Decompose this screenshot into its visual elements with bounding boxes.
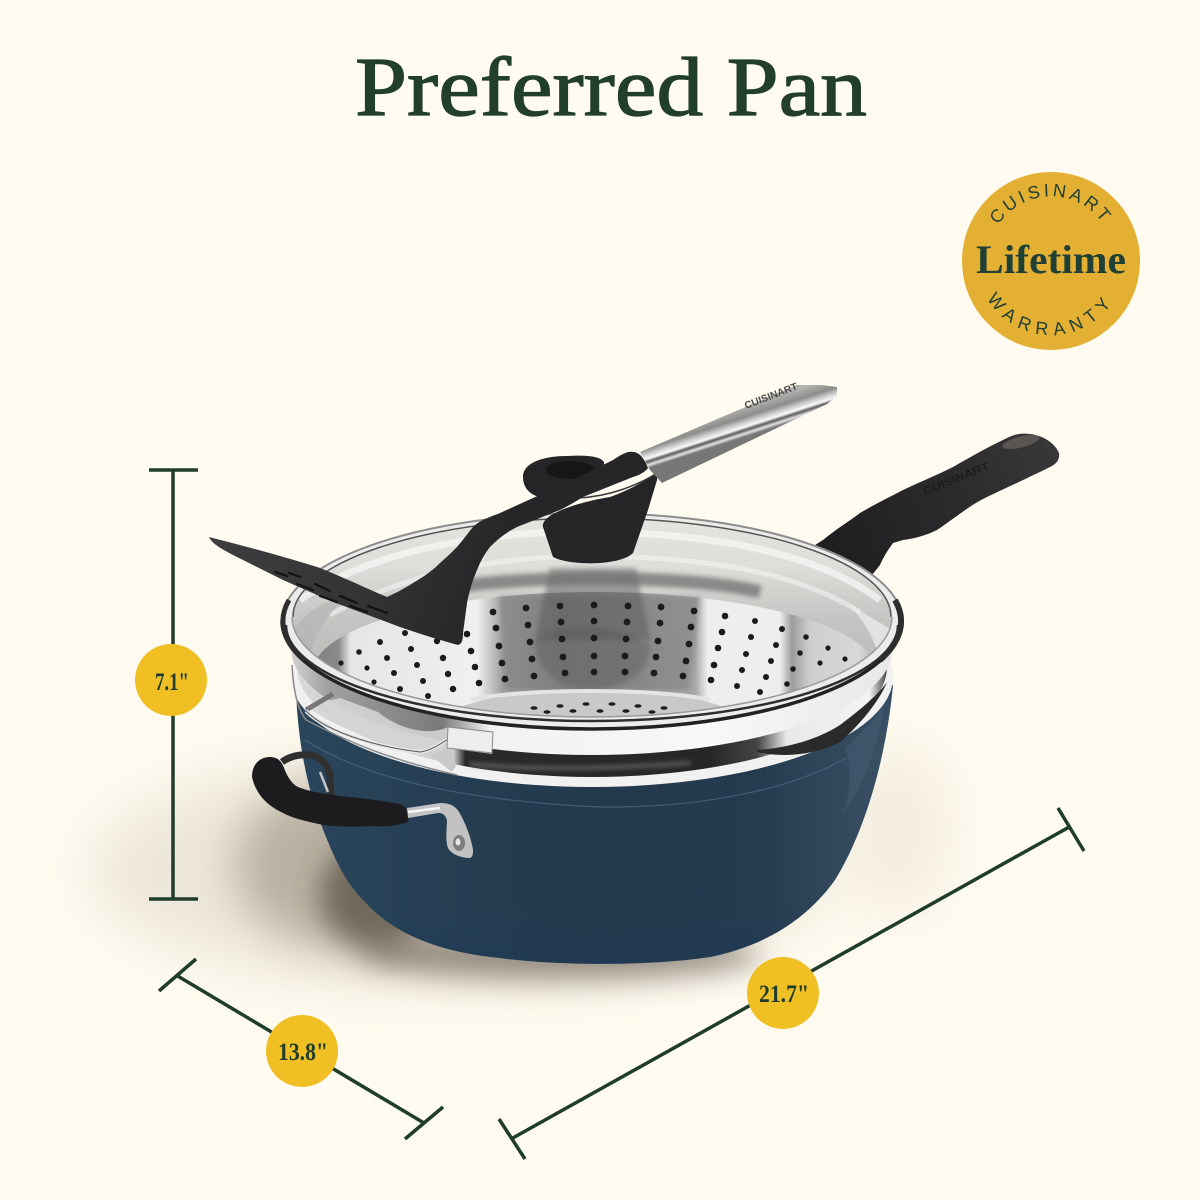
title: Preferred Pan	[355, 41, 867, 134]
badge: lifetime warranty: Lifetime	[976, 237, 1126, 282]
height dimension: 7.1 inch	[135, 470, 207, 899]
lid knob	[523, 456, 658, 563]
pan chrome rim	[291, 567, 893, 787]
width dimension: 21.7 inch: 21.7"	[759, 981, 809, 1008]
steamer dark band	[297, 557, 887, 777]
strainer holes	[338, 602, 848, 714]
badge: lifetime warranty	[962, 172, 1140, 350]
spatula steel handle: CUISINART	[743, 381, 799, 412]
pan long handle: CUISINART	[922, 460, 991, 498]
pan body	[296, 640, 893, 964]
badge: lifetime warranty: CUISINART	[990, 184, 1112, 222]
height dimension: 7.1 inch: 7.1"	[155, 669, 189, 696]
side handle grip	[252, 755, 409, 827]
steamer basket interior with holes	[292, 518, 892, 716]
pan long handle	[815, 432, 1059, 575]
side handle bracket	[407, 803, 473, 858]
spatula steel handle	[640, 381, 837, 483]
depth dimension: 13.8 inch: 13.8"	[278, 1039, 328, 1066]
width dimension: 21.7 inch	[499, 808, 1084, 1159]
steamer side loop handle	[306, 694, 493, 772]
pan shadow	[90, 745, 950, 988]
glass lid rim	[281, 512, 903, 730]
depth dimension: 13.8 inch	[159, 959, 443, 1139]
badge: lifetime warranty: WARRANTY	[988, 291, 1108, 336]
steamer chrome band	[291, 541, 893, 768]
spatula head and neck	[209, 452, 648, 645]
